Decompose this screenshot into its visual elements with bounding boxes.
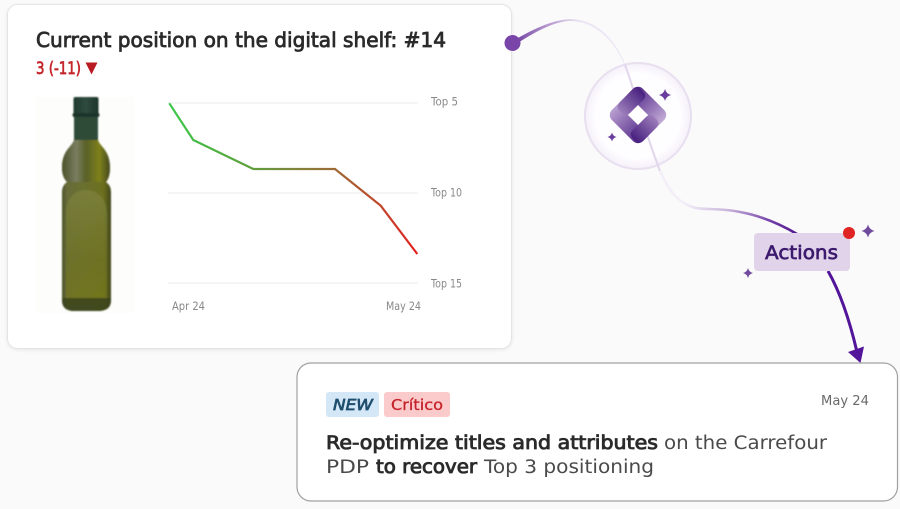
recommendation text [326,433,827,478]
date: May 24 [821,393,869,409]
connector: AI icon to actions [660,171,797,234]
tag: critical: Crítico [391,396,443,414]
icon: sparkle left [743,268,753,278]
recommendation text: on the Carrefour [664,433,827,454]
tag: new [326,392,379,417]
line chart: rank over time: Top 5 [430,94,458,108]
connector: card to AI icon [504,19,625,65]
icon: AI assistant halo [585,63,691,171]
recommendation text: PDP [326,457,369,478]
rank change value: 3 (-11) [36,59,81,78]
tag: critical [384,392,450,417]
panel: recommendation card [297,363,898,501]
badge: actions [743,224,874,278]
badge: actions: Actions [765,242,838,264]
line chart: rank over time: Top 15 [430,276,462,290]
image: olive oil bottle [36,97,134,313]
recommendation text: Top 3 positioning [483,457,654,478]
icon: sparkle small [608,132,616,142]
line chart: rank over time [168,94,462,313]
recommendation text: to recover [376,457,477,478]
line chart: rank over time: Apr 24 [172,299,205,313]
panel: current position card [8,4,512,348]
line chart: rank over time: May 24 [386,299,421,313]
icon: sparkle right [862,224,874,238]
arrow: actions to recommendation [828,271,864,363]
line chart: rank over time: Top 10 [430,186,462,200]
heading: current position: Current position on the digital shelf: #14 [36,28,446,52]
recommendation text: Re-optimize titles and attributes [326,433,658,454]
icon: sparkle large [659,89,671,101]
icon: ribbon logo [607,84,669,146]
tag: new: NEW [333,396,374,414]
alert dot [843,227,855,239]
